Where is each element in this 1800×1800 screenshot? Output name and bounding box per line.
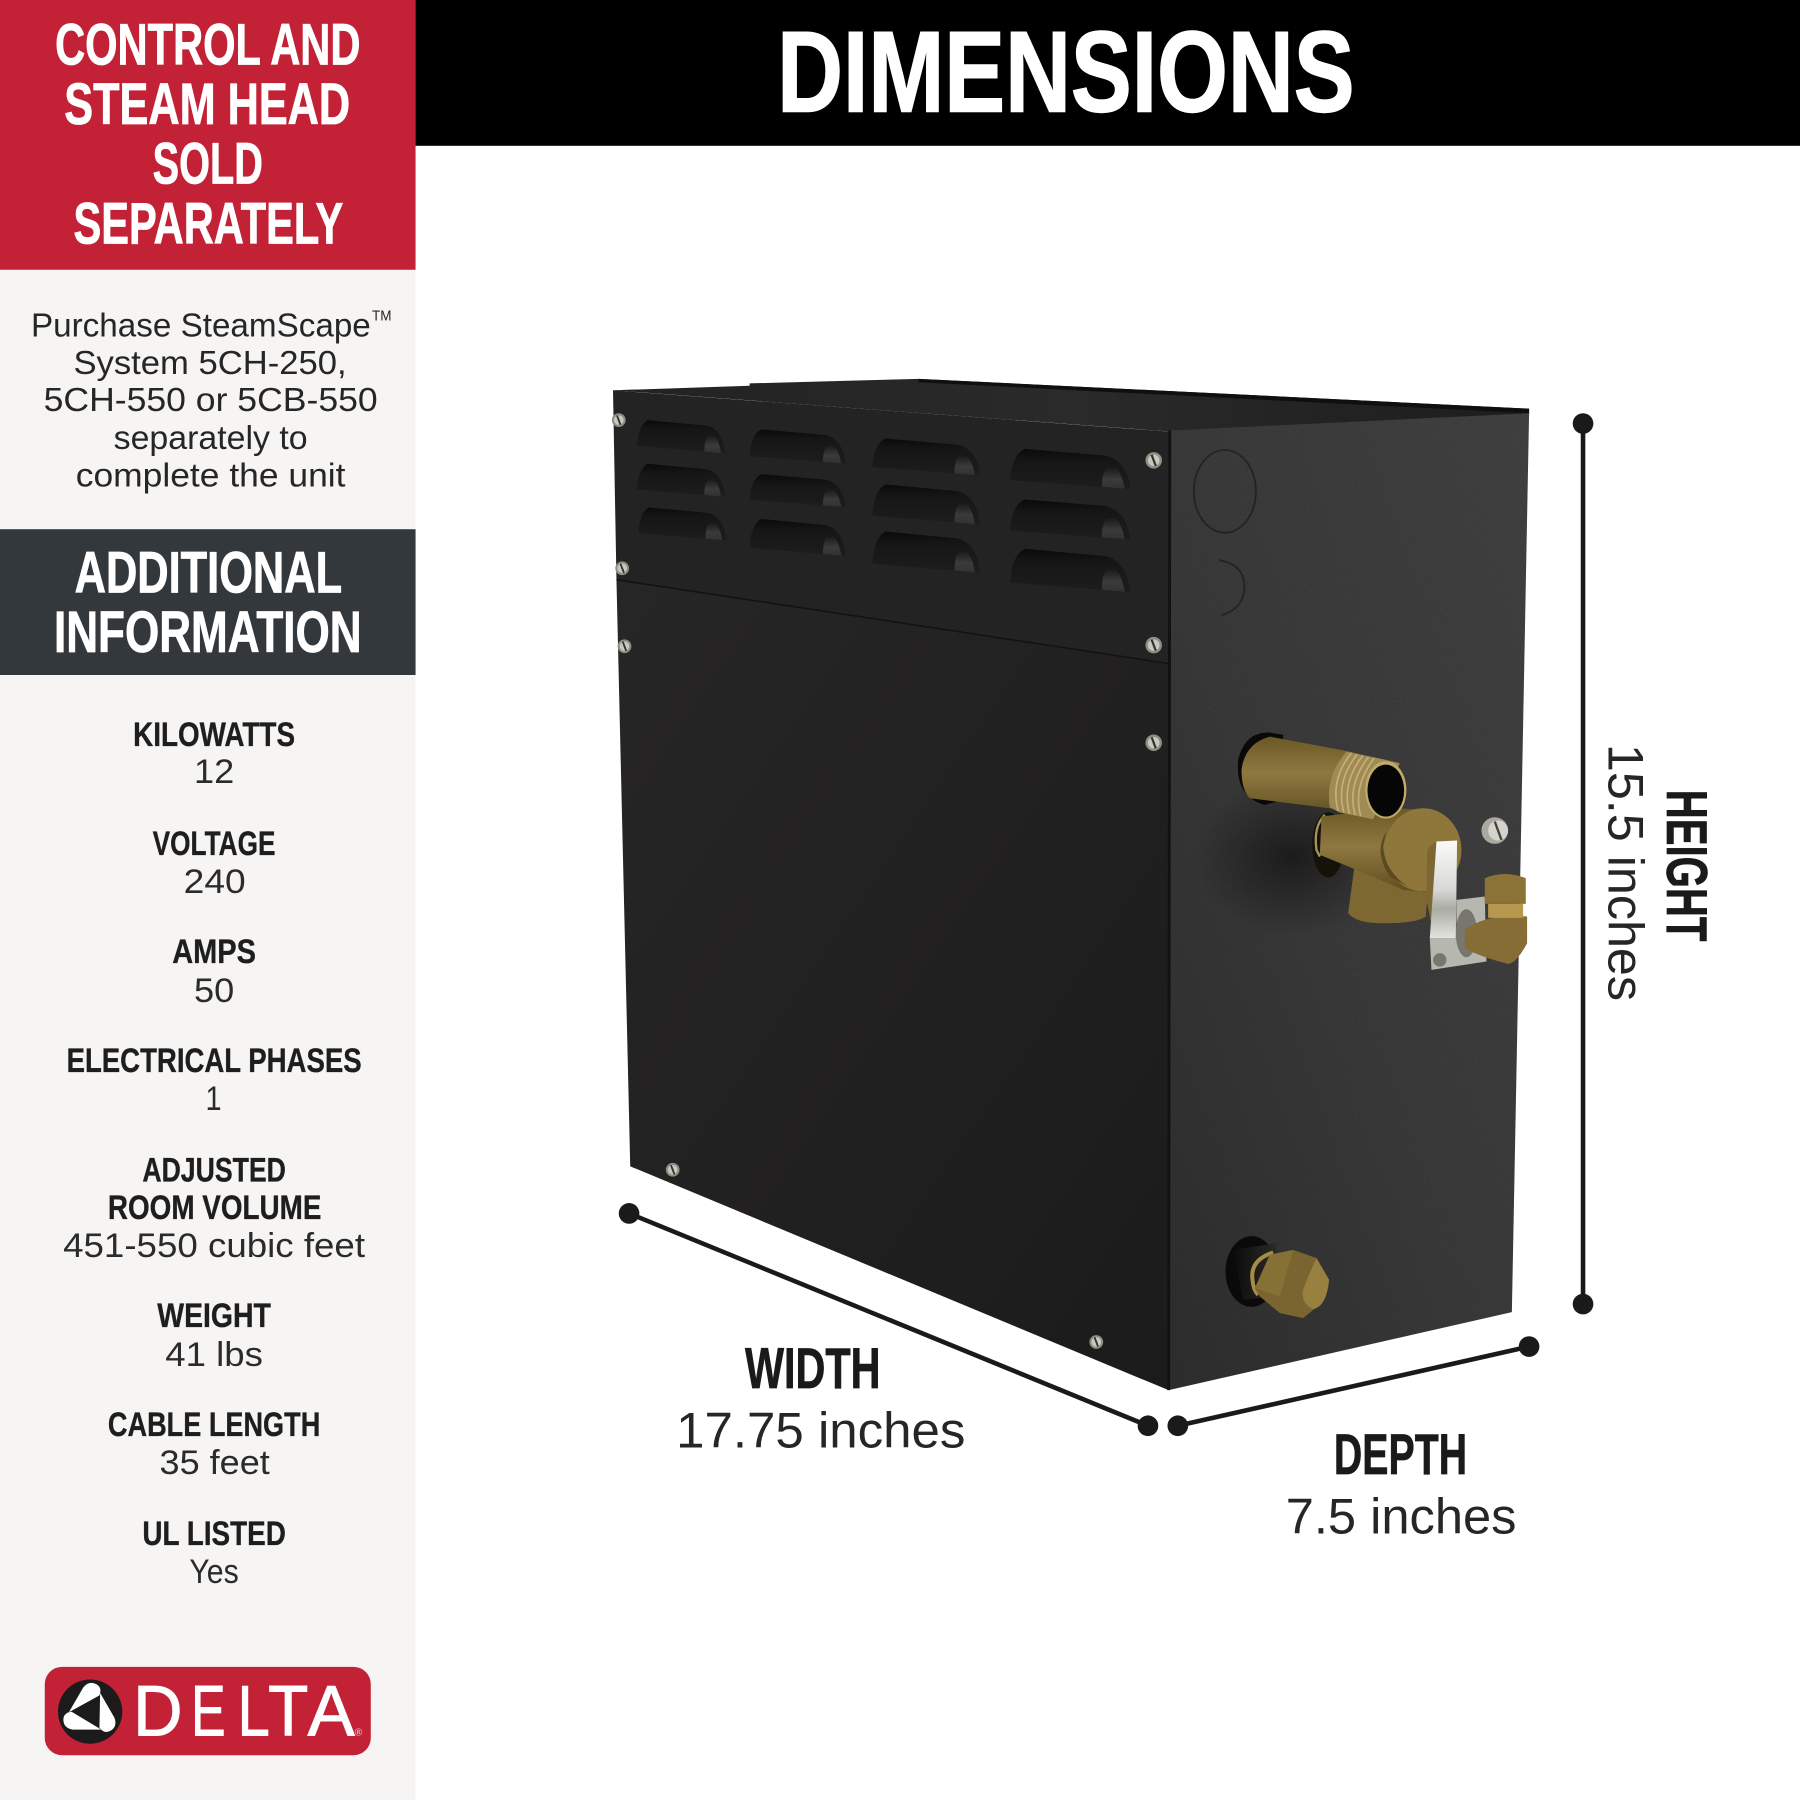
callout: control and steam head sold separately: CONTROL AND bbox=[55, 12, 360, 77]
drain stem bbox=[1233, 1243, 1276, 1300]
spec: kilowatts: 12 bbox=[194, 753, 234, 791]
hex cap bbox=[1255, 1250, 1329, 1318]
logo: delta: L bbox=[238, 1673, 270, 1752]
box top bbox=[613, 379, 1529, 432]
spec: amps: 50 bbox=[194, 972, 234, 1010]
spec: weight: 41 lbs bbox=[165, 1336, 263, 1374]
spec: adjusted room volume bbox=[63, 1151, 366, 1265]
text: purchase note: 5CH-550 or 5CB-550 bbox=[44, 382, 378, 419]
upper brass valve assembly bbox=[1193, 733, 1527, 970]
spec: ul listed bbox=[142, 1515, 286, 1591]
spec: ul listed: Yes bbox=[189, 1553, 239, 1591]
label: width: 17.75 inches bbox=[676, 1402, 965, 1459]
side grain bbox=[1169, 413, 1529, 1390]
spec: electrical phases bbox=[67, 1042, 362, 1118]
spec: ul listed: UL LISTED bbox=[142, 1515, 286, 1553]
pipe body bbox=[1242, 737, 1383, 818]
corner seam bbox=[1169, 430, 1170, 1390]
logo: delta: ® bbox=[355, 1728, 363, 1739]
lower brass cap bbox=[1226, 1236, 1329, 1318]
logo: delta bbox=[45, 1667, 371, 1755]
spec: adjusted room volume: ADJUSTED bbox=[142, 1151, 286, 1189]
text: purchase note: System 5CH-250, bbox=[73, 345, 347, 382]
handle bbox=[1426, 842, 1438, 933]
tee stem bbox=[1348, 863, 1428, 923]
text: purchase note: Purchase SteamScape bbox=[31, 307, 371, 344]
callout: control and steam head sold separately: STEAM HEAD bbox=[64, 72, 350, 137]
cap face bbox=[1303, 1258, 1329, 1309]
valve disc bbox=[1385, 808, 1461, 892]
screws bbox=[612, 413, 1162, 1349]
spec: kilowatts bbox=[133, 716, 295, 791]
spec: electrical phases: 1 bbox=[205, 1080, 222, 1118]
label: depth bbox=[1286, 1423, 1516, 1545]
pipe hole bbox=[1238, 733, 1283, 805]
vents column 1 bbox=[637, 420, 727, 540]
mounting plate bbox=[1430, 897, 1486, 970]
spec: weight bbox=[157, 1297, 271, 1374]
spec: adjusted room volume: ROOM VOLUME bbox=[108, 1189, 321, 1227]
logo: delta: D bbox=[133, 1673, 183, 1752]
elbow fitting bbox=[1465, 916, 1527, 964]
label: width bbox=[676, 1337, 965, 1459]
tee body rear ring bbox=[1312, 812, 1344, 878]
dimension line: depth bbox=[1167, 1336, 1539, 1436]
box front face bbox=[616, 580, 1169, 1390]
heading: additional information: INFORMATION bbox=[54, 600, 362, 665]
sidebar panel bbox=[0, 0, 416, 1800]
callout: control and steam head sold separately: SEPARATELY bbox=[73, 191, 343, 256]
title bar: dimensions bbox=[416, 0, 1800, 146]
spec: amps: AMPS bbox=[172, 933, 256, 971]
heading: additional information: ADDITIONAL bbox=[75, 540, 342, 605]
spec: cable length bbox=[108, 1406, 320, 1482]
text: purchase note bbox=[31, 307, 391, 495]
label: height bbox=[1597, 744, 1718, 1001]
spec: voltage: 240 bbox=[184, 863, 246, 901]
product illustration: steam generator bbox=[612, 379, 1529, 1390]
logo: delta: T bbox=[268, 1673, 308, 1752]
dimension line: width bbox=[619, 1203, 1158, 1436]
spec: adjusted room volume: 451-550 cubic feet bbox=[63, 1227, 366, 1265]
title bar: dimensions: DIMENSIONS bbox=[777, 8, 1355, 136]
label: depth: DEPTH bbox=[1334, 1423, 1467, 1487]
logo: delta: A bbox=[308, 1673, 355, 1752]
drain hole bbox=[1226, 1236, 1277, 1307]
spec: cable length: 35 feet bbox=[160, 1444, 270, 1482]
callout: control and steam head sold separately bbox=[0, 0, 416, 270]
threads bbox=[1329, 752, 1400, 819]
text: purchase note: complete the unit bbox=[76, 458, 346, 495]
label: width: WIDTH bbox=[745, 1337, 880, 1401]
vent panel bbox=[613, 390, 1170, 664]
mounting screw bbox=[1481, 817, 1508, 844]
label: height: 15.5 inches bbox=[1597, 744, 1654, 1001]
brass ring bbox=[1252, 1253, 1273, 1295]
dimension line: height bbox=[1573, 413, 1593, 1314]
vents column 3 bbox=[872, 439, 980, 573]
spec: voltage: VOLTAGE bbox=[153, 825, 276, 863]
panel seam bbox=[616, 580, 1169, 664]
spec: electrical phases: ELECTRICAL PHASES bbox=[67, 1042, 362, 1080]
vents column 2 bbox=[750, 429, 846, 556]
valve shadow bbox=[1193, 777, 1393, 937]
cap facet bbox=[1255, 1250, 1293, 1296]
spec: kilowatts: KILOWATTS bbox=[133, 716, 295, 754]
spec: cable length: CABLE LENGTH bbox=[108, 1406, 320, 1444]
pipe end bbox=[1365, 761, 1406, 819]
label: height: HEIGHT bbox=[1654, 790, 1718, 941]
heading: additional information bbox=[0, 529, 416, 675]
callout: control and steam head sold separately: SOLD bbox=[153, 132, 263, 197]
spec: amps bbox=[172, 933, 256, 1010]
logo: delta: E bbox=[191, 1673, 226, 1752]
text: purchase note: separately to bbox=[114, 420, 308, 457]
spec: voltage bbox=[153, 825, 276, 901]
label: depth: 7.5 inches bbox=[1286, 1488, 1516, 1545]
vents column 4 bbox=[1010, 449, 1131, 592]
text: purchase note: TM bbox=[372, 307, 391, 324]
tee body bbox=[1320, 808, 1436, 893]
spec: weight: WEIGHT bbox=[157, 1297, 271, 1335]
box side face bbox=[1169, 413, 1529, 1390]
knockouts bbox=[1194, 450, 1256, 615]
box top rear edge bbox=[918, 379, 1529, 413]
